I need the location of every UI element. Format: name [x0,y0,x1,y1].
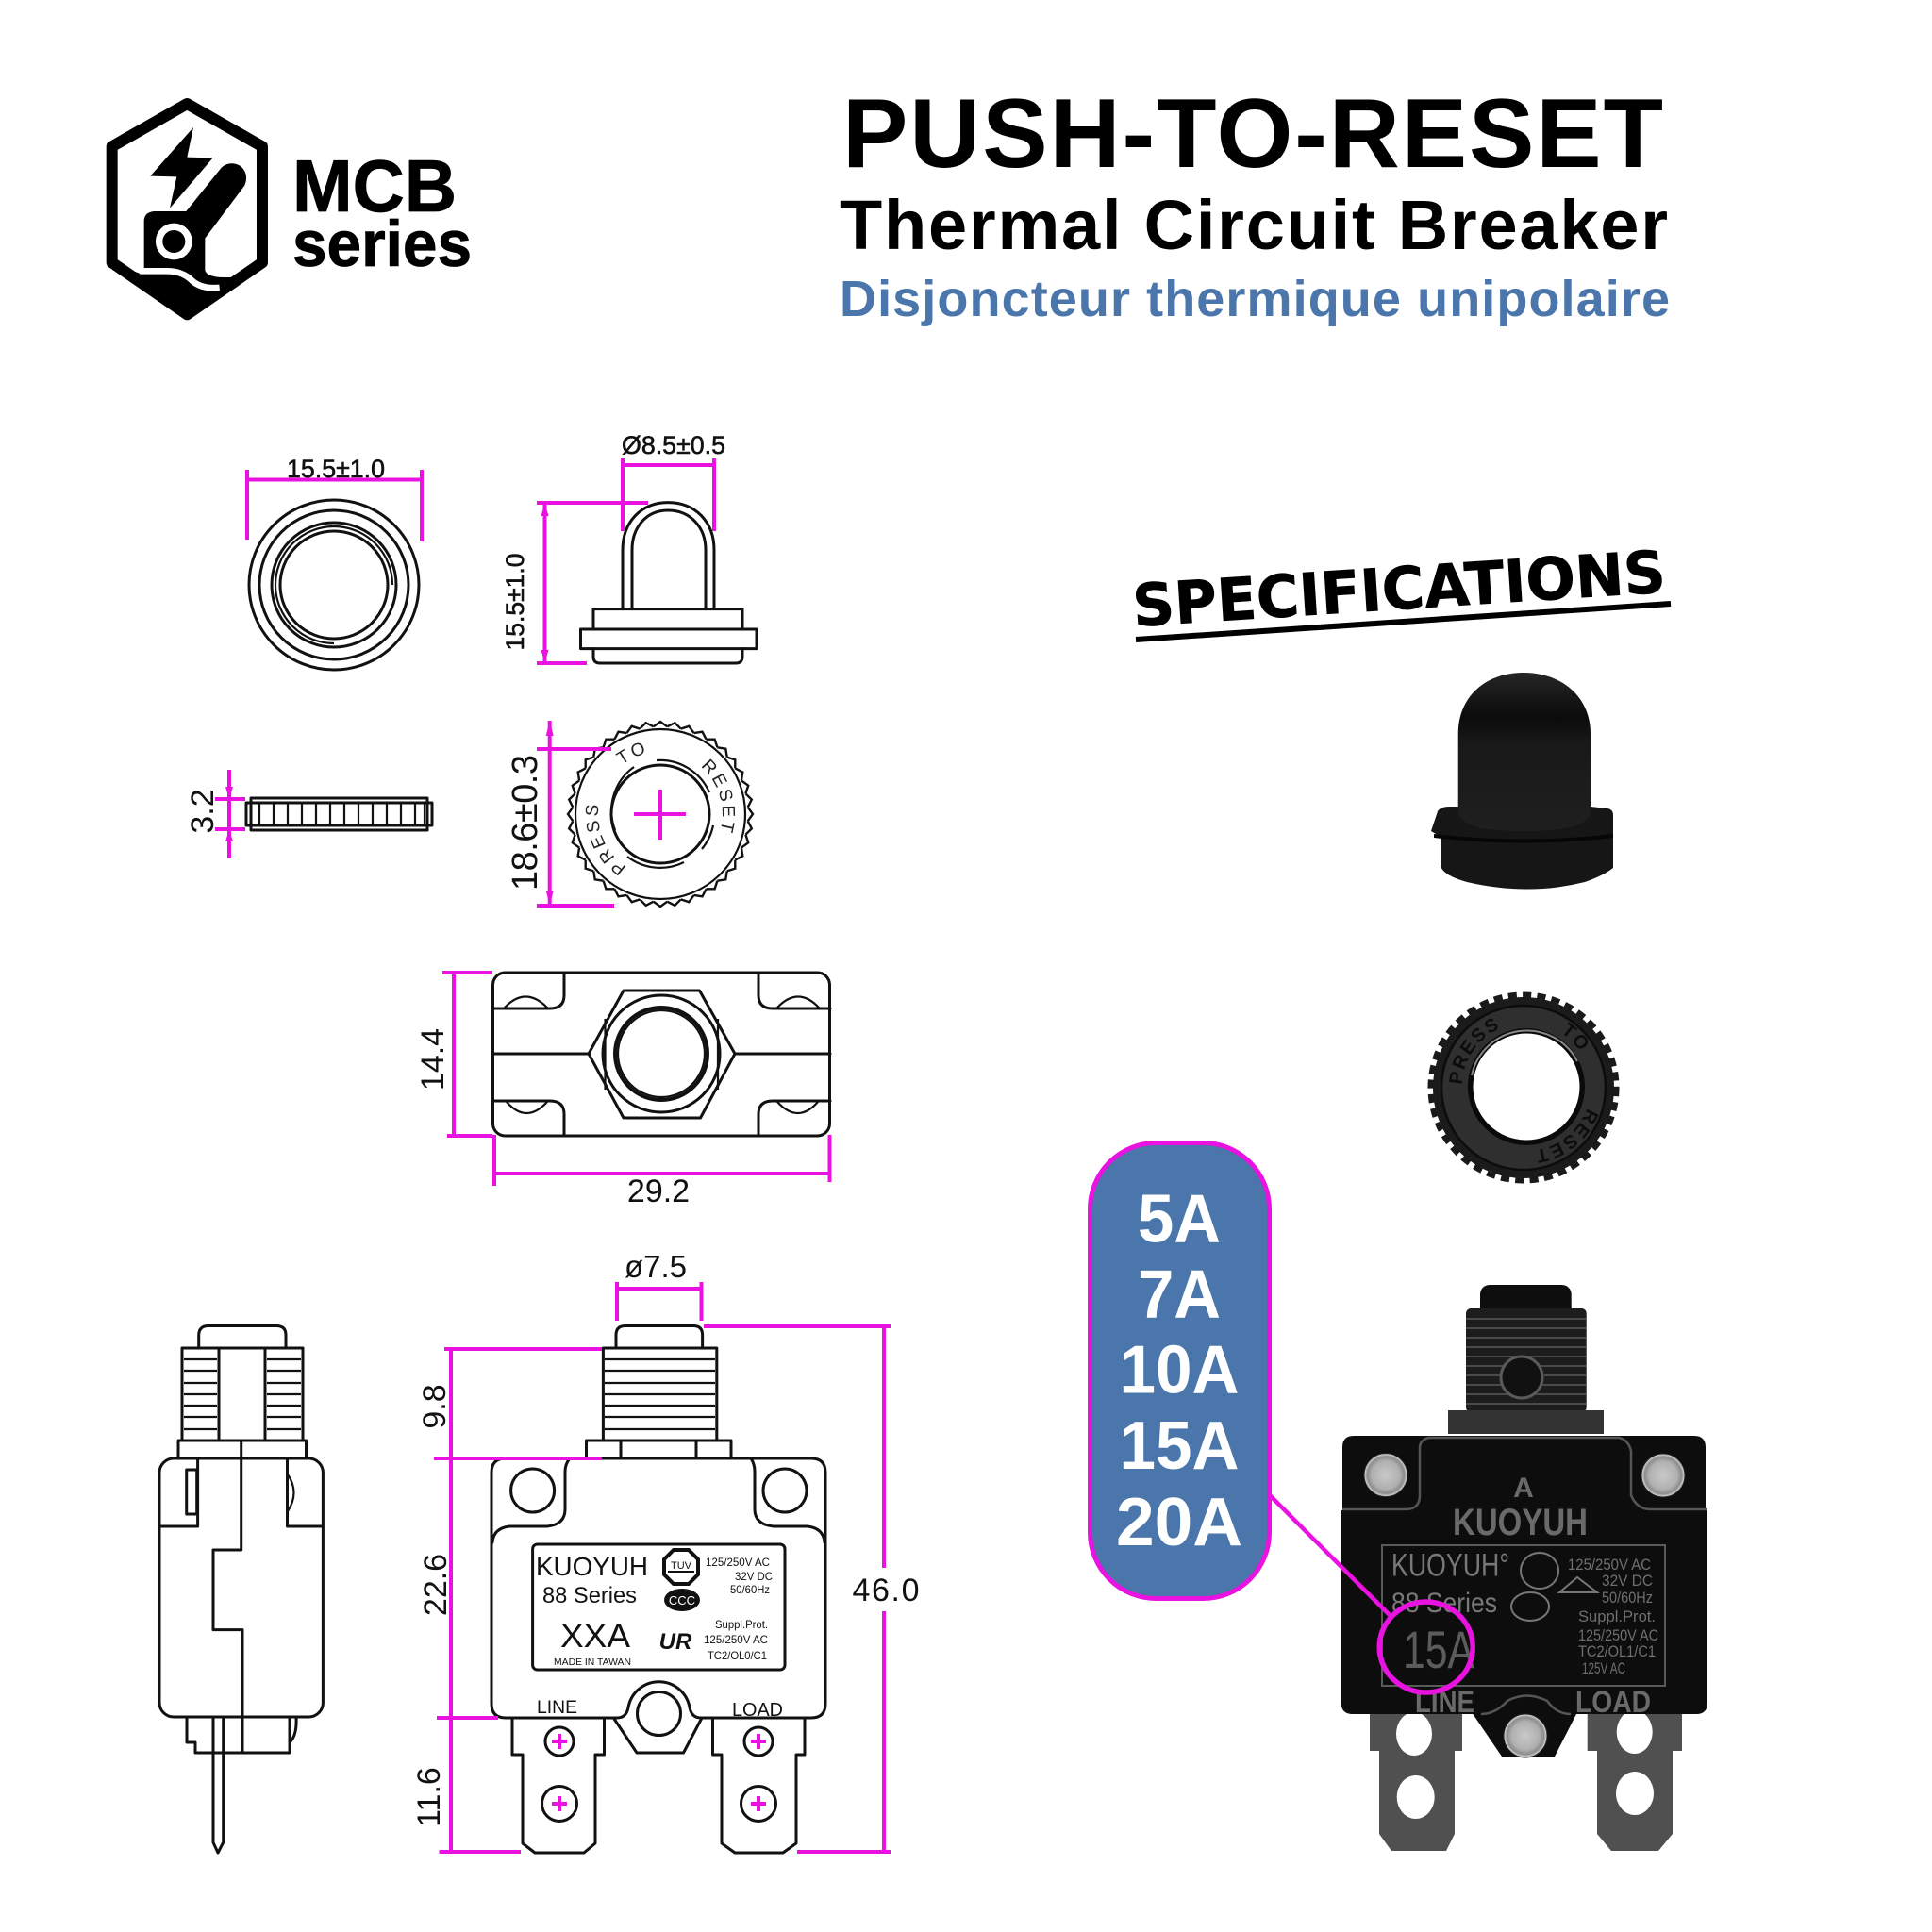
dimension: nut diameter [506,721,614,906]
photo embossed markings: TC2/OL1/C1 [1578,1642,1656,1660]
panel: available amperage ratings [1091,1143,1270,1598]
icon: TUV mark: TUV [671,1560,692,1572]
dimensions: front view: 9.8 [417,1384,453,1429]
nut embossed lettering [1449,1019,1598,1163]
photo terminals [1370,1707,1682,1851]
label plate: TC2/OL0/C1 [708,1649,767,1662]
photo embossed markings: LINE [1415,1685,1474,1719]
dimensions: front view: 46.0 [853,1573,919,1608]
dimension: cap diameter [247,455,422,541]
dimensions: front view [411,1249,919,1852]
photo embossed markings: Suppl.Prot. [1578,1607,1656,1625]
title block [840,79,1670,327]
dimensions: width 29.2 and height 14.4: 29.2 [627,1174,690,1209]
left terminal [512,1718,604,1853]
nut embossed lettering: PRESS [585,806,626,875]
subheading: French name: Disjoncteur thermique unipolaire [840,271,1670,327]
nut embossed lettering: RESET [1538,1109,1598,1163]
photo rivets [1364,1454,1685,1757]
nut embossed lettering: TO [615,743,644,762]
photo embossed markings: A [1513,1473,1534,1504]
dimension: cap diameter and height [501,431,725,663]
terminal labels: LINE [537,1698,577,1718]
photo embossed markings: 88 Series [1391,1588,1497,1619]
dimension: cap diameter and height: 15.5±1.0 [501,553,529,651]
drawing: breaker side view [159,1326,323,1853]
nut embossed lettering: RESET [702,758,736,834]
heading: PUSH-TO-RESET: PUSH-TO-RESET [842,79,1663,189]
panel: available amperage ratings: 5A [1138,1182,1221,1257]
panel: available amperage ratings: 7A [1138,1257,1221,1333]
drawing: cap top view [247,455,422,670]
photo breaker body [1341,1436,1707,1714]
terminal labels [537,1698,783,1721]
icon: CCC mark [664,1589,700,1611]
dimension: nut thickness: 3.2 [185,789,221,834]
icon: CCC mark: CCC [669,1593,695,1607]
label plate: 88 Series [542,1583,637,1608]
label plate: 125/250V AC [706,1556,770,1569]
right terminal [713,1718,805,1853]
panel: available amperage ratings: 15A [1119,1408,1240,1484]
photo button and thread [1448,1285,1604,1434]
logo wordmark: series [292,208,472,280]
photo embossed markings: KUOYUH° [1391,1547,1509,1583]
logo: MCB series [112,104,472,316]
label plate: MADE IN TAWAN [554,1657,631,1668]
label plate [533,1544,785,1670]
nut embossed lettering [585,743,736,875]
nut embossed lettering: PRESS [1449,1019,1498,1083]
photo embossed markings: 125/250V AC [1568,1556,1651,1574]
logo wordmark [292,144,472,280]
dimensions: width 29.2 and height 14.4: 14.4 [415,1028,451,1091]
nut embossed lettering: TO [1564,1023,1588,1049]
photo embossed markings: KUOYUH [1453,1502,1588,1543]
dimension: nut thickness [185,770,245,858]
label plate: 32V DC [735,1570,773,1583]
photo embossed markings [1382,1473,1665,1719]
specifications heading: SPECIFICATIONS [1130,538,1668,641]
push button and threaded collar [587,1326,731,1458]
icon: hexagon badge with lever and lightning bolt [112,104,262,316]
drawing: knurled nut front view [506,721,755,908]
label plate: KUOYUH [536,1552,648,1581]
photo embossed markings: 125V AC [1582,1659,1625,1677]
panel: available amperage ratings: 10A [1119,1333,1240,1408]
dimensions: front view: 22.6 [418,1554,454,1616]
label plate: 50/60Hz [730,1583,770,1596]
drawing: cap side view [501,431,757,663]
photo embossed markings: 15A [1403,1620,1474,1679]
dimension: cap diameter: 15.5±1.0 [287,455,385,483]
subheading: Thermal Circuit Breaker: Thermal Circuit Breaker [840,186,1668,264]
photo embossed markings: 32V DC [1602,1572,1653,1590]
photo: rubber push-button cap [1431,673,1613,889]
breaker body outline [491,1458,825,1718]
drawing: breaker top view [415,973,830,1209]
terminal labels: LOAD [732,1700,783,1721]
label plate: 125/250V AC [704,1633,768,1646]
label plate: Suppl.Prot. [715,1618,768,1631]
photo: circuit breaker [1341,1285,1707,1851]
drawing: breaker front view [411,1249,919,1853]
dimensions: width 29.2 and height 14.4 [415,973,830,1209]
dimension: cap diameter and height: Ø8.5±0.5 [622,431,725,459]
logo wordmark: MCB [292,144,457,227]
panel: available amperage ratings: 20A [1116,1485,1242,1560]
photo embossed markings: LOAD [1575,1685,1651,1719]
drawing: nut side view [185,770,432,858]
label plate: XXA [560,1618,631,1655]
icon: UR mark: UR [659,1629,692,1655]
photo: knurled retaining nut [1428,992,1619,1183]
photo embossed markings: 125/250V AC [1578,1626,1658,1644]
dimensions: front view: ø7.5 [625,1249,687,1284]
dimensions: front view: 11.6 [411,1767,447,1827]
icon: TUV mark [664,1550,698,1584]
dimension: nut diameter: 18.6±0.3 [506,755,545,891]
callout: rating circle and leader line [1269,1494,1473,1692]
photo embossed markings: 50/60Hz [1602,1589,1653,1607]
